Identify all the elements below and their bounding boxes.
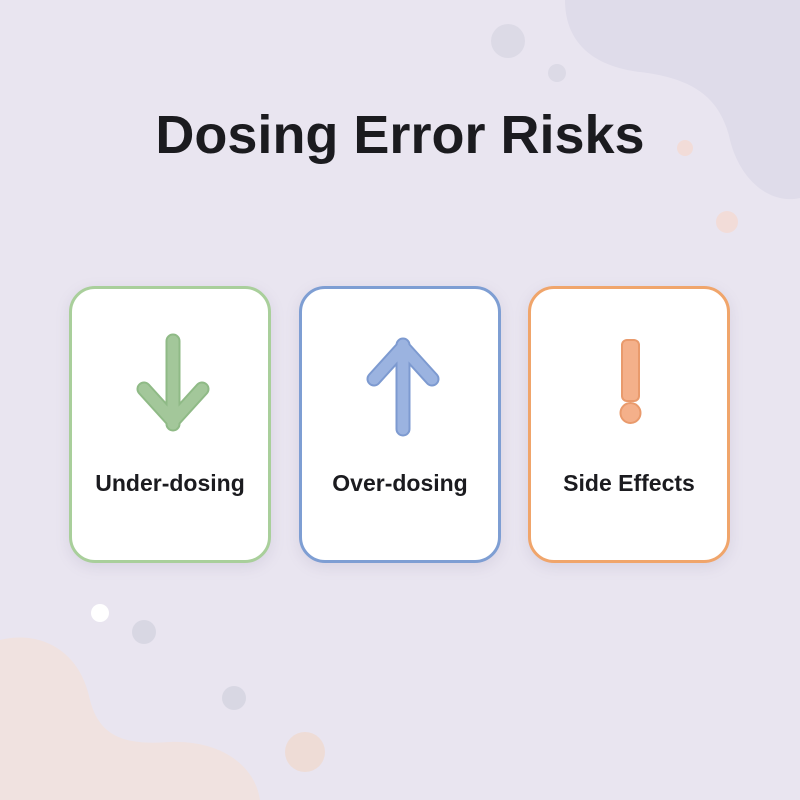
- label: over-dosing: Over-dosing: [332, 470, 468, 496]
- icon: down arrow: [136, 334, 210, 432]
- icon: exclamation: [620, 339, 642, 424]
- icon: up arrow: [366, 338, 440, 436]
- title: Dosing Error Risks: [155, 105, 645, 165]
- panel: over-dosing: [299, 286, 501, 563]
- label: side effects: Side Effects: [563, 470, 695, 496]
- label: under-dosing: Under-dosing: [95, 470, 245, 496]
- panel: under-dosing: [69, 286, 271, 563]
- panel: side effects: [528, 286, 730, 563]
